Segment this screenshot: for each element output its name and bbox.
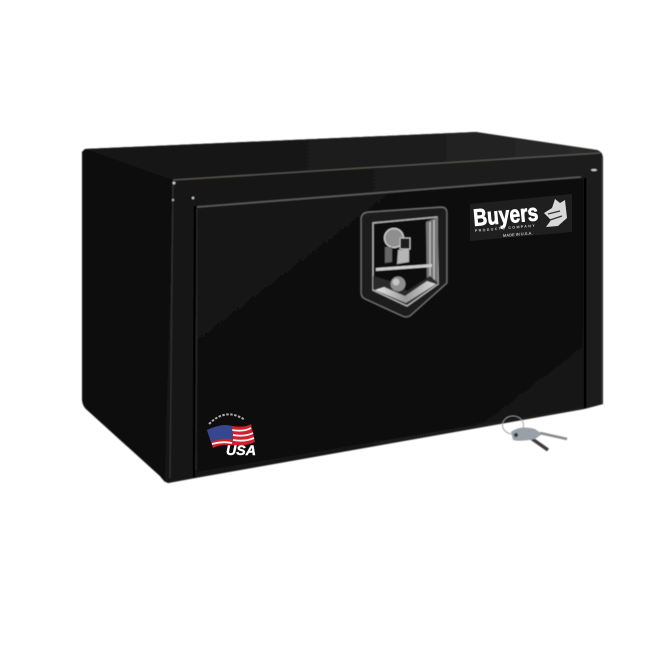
- flag white stripes: [212, 428, 254, 444]
- mounting bolt: [390, 276, 406, 292]
- box silhouette: [82, 132, 603, 483]
- door left edge: [196, 209, 197, 470]
- truck box body: [82, 132, 603, 483]
- key ring: [502, 416, 524, 434]
- lock stem shadow: [385, 247, 392, 263]
- flag stripes: [207, 424, 255, 448]
- front key head: [511, 428, 542, 441]
- top face: [85, 132, 601, 180]
- latch recess: [373, 217, 438, 306]
- recess bottom wall: [373, 276, 438, 305]
- T-handle latch: [361, 207, 447, 317]
- key hole: [514, 433, 518, 437]
- key slot: [400, 238, 410, 249]
- USA text: USA: [226, 442, 256, 458]
- door side gap: [194, 178, 585, 477]
- USA flag badge: [207, 414, 256, 458]
- made in line: MADE IN U.S.A.: [503, 230, 533, 238]
- frame highlight top: [173, 153, 600, 180]
- flag canton: [207, 425, 233, 442]
- handle stem: [397, 249, 409, 264]
- bull mascot: [544, 199, 567, 227]
- Buyers logo label: [470, 194, 572, 241]
- lock cylinder: [384, 228, 404, 248]
- keys on a ring: [502, 416, 567, 450]
- left side face: [82, 149, 173, 482]
- recess right wall: [426, 217, 438, 290]
- latch outer flange: [361, 207, 447, 317]
- door panel: [197, 177, 583, 472]
- company line: PRODUCTS COMPANY: [475, 224, 535, 233]
- front frame: [165, 153, 603, 483]
- door top edge: [197, 177, 581, 207]
- rear key blade: [528, 436, 548, 450]
- frame highlight left: [170, 182, 173, 478]
- brand name: Buyers: [472, 199, 539, 232]
- dotted arc: [209, 414, 245, 424]
- frame highlight right: [601, 156, 603, 404]
- corner glints: [172, 169, 597, 201]
- handle bar: [376, 264, 432, 271]
- front key blade: [540, 433, 567, 439]
